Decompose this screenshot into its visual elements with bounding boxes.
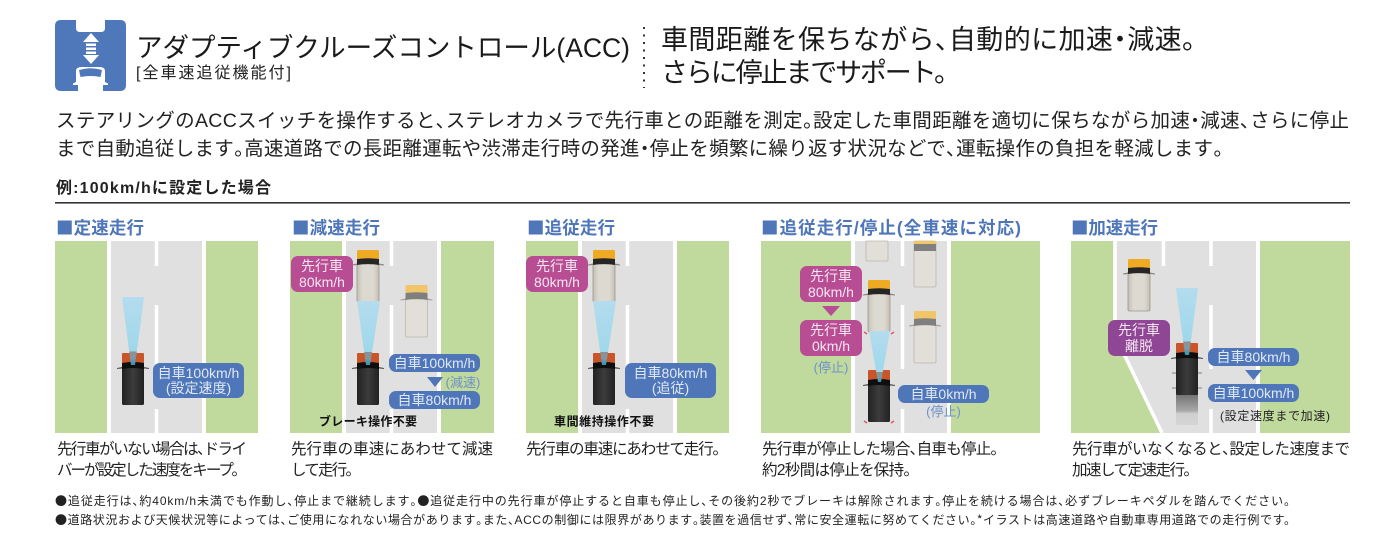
dotted divider <box>643 27 645 88</box>
caption: 約2秒間は停止を保持。 <box>762 461 919 479</box>
lead speed label: 先行車 <box>810 268 852 284</box>
car: own <box>117 353 149 405</box>
car: lead leaving <box>1123 259 1155 311</box>
speed label <box>625 363 716 398</box>
speed label: 自車0km/h <box>910 386 977 402</box>
caption: バーが設定した速度をキープ。 <box>57 461 247 479</box>
note: ブレーキ操作不要 <box>319 414 417 428</box>
intro text <box>56 110 1349 160</box>
speed label: 自車100km/h <box>158 365 239 381</box>
speed label: (追従) <box>652 380 689 396</box>
speed change label <box>389 354 480 409</box>
car: adjacent <box>909 311 941 363</box>
panel: constant speed <box>55 215 258 479</box>
caption: 先行車が停止した場合、自車も停止。 <box>762 440 1006 458</box>
footnotes: ●道路状況および天候状況等によっては、ご使用になれない場合があります。また、ACCの制御には限界があります。装置を過信せず、常に安全運転に努めてください。*イラストは高速道路や自動車専用道路での走行例です。 <box>55 511 1296 528</box>
intro text: まで自動追従します。高速道路での長距離運転や渋滞走行時の発進・停止を頻繁に繰り返す状況などで、運転操作の負担を軽減します。 <box>56 138 1223 160</box>
headline: さらに停止までサポート。 <box>661 58 961 88</box>
heading: follow and stop: ■追従走行/停止(全車速に対応) <box>761 215 1021 240</box>
speed change label: 自車100km/h <box>394 355 475 371</box>
speed change label <box>1208 348 1299 402</box>
car: own <box>352 353 384 405</box>
lead label: 80km/h <box>534 274 580 290</box>
caption: して走行。 <box>291 461 361 479</box>
caption: 先行車の車速にあわせて走行。 <box>526 440 728 458</box>
caption: 加速して定速走行。 <box>1072 461 1199 479</box>
leaving label: 離脱 <box>1125 338 1153 354</box>
heading: deceleration: ■減速走行 <box>292 215 380 240</box>
caption: 先行車がいない場合は、ドライ <box>57 440 247 458</box>
caption: 先行車の車速にあわせて減速 <box>291 440 493 458</box>
lead speed label <box>800 266 862 356</box>
stop note: (停止) <box>814 360 848 375</box>
speed label <box>898 385 989 419</box>
speed label: (停止) <box>926 404 961 419</box>
brake lights <box>864 332 894 423</box>
car: adjacent <box>400 285 432 337</box>
caption <box>762 440 1006 479</box>
speed label: 自車80km/h <box>634 365 707 381</box>
panel: following <box>526 215 729 458</box>
icon: ACC <box>55 20 126 91</box>
footnotes <box>55 492 1296 528</box>
panel: acceleration <box>1071 215 1350 479</box>
lead label <box>291 256 353 292</box>
headline: 車間距離を保ちながら、自動的に加速・減速。 <box>661 25 1209 55</box>
car: lead <box>588 250 620 302</box>
car: top left <box>866 241 888 261</box>
note: 車間維持操作不要 <box>554 414 654 428</box>
title <box>136 33 630 82</box>
lead label: 80km/h <box>299 274 345 290</box>
speed change label: 自車80km/h <box>1217 349 1290 365</box>
headline <box>661 25 1209 88</box>
title: アダプティブクルーズコントロール(ACC) <box>136 33 630 63</box>
caption <box>291 440 493 479</box>
panel: deceleration <box>290 215 494 479</box>
car: top right <box>914 241 936 287</box>
motion trail <box>1172 373 1202 425</box>
heading: acceleration: ■加速走行 <box>1071 215 1158 240</box>
radar beam <box>357 301 380 365</box>
heading: constant speed: ■定速走行 <box>56 215 144 240</box>
car: own <box>863 370 895 422</box>
leaving label <box>1108 320 1170 356</box>
radar beam <box>1176 288 1198 355</box>
caption <box>1072 440 1350 479</box>
lead speed label: 先行車 <box>810 322 852 338</box>
speed change label: (減速) <box>446 375 480 390</box>
panel: follow and stop <box>761 215 1040 479</box>
footnotes: ●追従走行は、約40km/h未満でも作動し、停止まで継続します。●追従走行中の先行車が停止すると自車も停止し、その後約2秒でブレーキは解除されます。停止を続ける場合は、必ずブレーキペダルを踏んでください。 <box>55 492 1296 509</box>
speed label: (設定速度) <box>166 380 231 396</box>
subtitle: [全車速追従機能付] <box>136 64 291 82</box>
car: lead <box>863 280 895 332</box>
note: (設定速度まで加速) <box>1220 409 1330 423</box>
lead speed label: 80km/h <box>808 284 854 300</box>
car: own <box>588 353 620 405</box>
car: own <box>1171 343 1203 395</box>
caption: 先行車がいなくなると、設定した速度まで <box>1072 440 1350 458</box>
speed label <box>153 363 244 398</box>
example label: 例:100km/hに設定した場合 <box>56 179 271 197</box>
radar beam <box>122 297 144 365</box>
intro text: ステアリングのACCスイッチを操作すると、ステレオカメラで先行車との距離を測定。設定した車間距離を適切に保ちながら加速・減速、さらに停止 <box>56 110 1349 132</box>
radar beam <box>869 331 890 382</box>
speed change label: 自車100km/h <box>1213 385 1294 401</box>
lead label: 先行車 <box>536 258 578 274</box>
lead speed label: 0km/h <box>812 338 850 354</box>
car: lead <box>352 250 384 302</box>
speed change label: 自車80km/h <box>398 392 471 408</box>
heading: following: ■追従走行 <box>527 215 615 240</box>
radar beam <box>593 301 616 365</box>
lead label: 先行車 <box>301 258 343 274</box>
caption <box>57 440 247 479</box>
lead label <box>526 256 588 292</box>
leaving label: 先行車 <box>1118 322 1160 338</box>
